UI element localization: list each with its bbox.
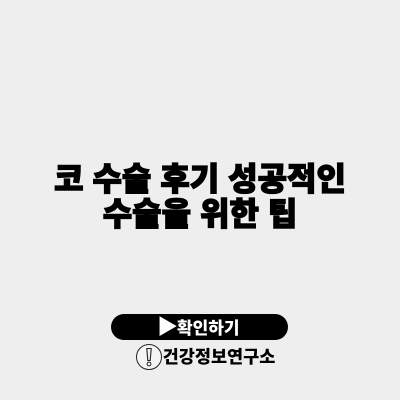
icon: exclamation in circle — [136, 344, 162, 370]
brand name: 건강정보연구소 — [163, 344, 275, 369]
title: 수술을 위한 팁 — [103, 189, 297, 235]
title — [54, 154, 346, 235]
button label: 확인하기 — [177, 314, 240, 339]
button arrow glyph: ▶ — [157, 311, 178, 341]
button: confirm — [111, 314, 288, 340]
title: 코 수술 후기 성공적인 — [54, 154, 346, 200]
